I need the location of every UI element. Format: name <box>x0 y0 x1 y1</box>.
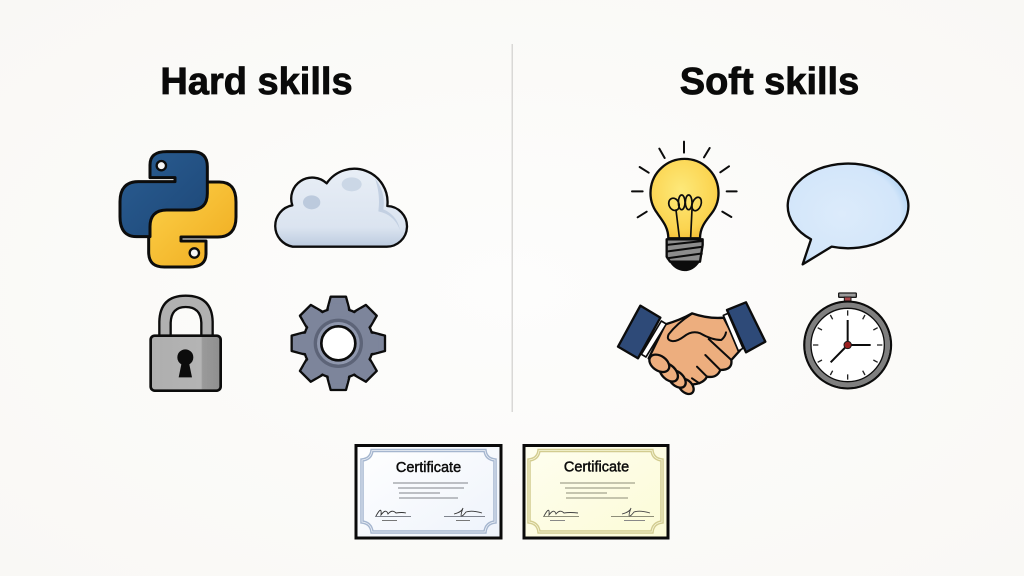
icon: python logo <box>120 152 236 267</box>
icon: gear <box>292 297 385 390</box>
panel: soft skills icons <box>632 142 908 388</box>
certificate title: Certificate <box>564 460 629 476</box>
icon: cloud <box>275 169 407 247</box>
heading: Hard skills: Hard skills <box>160 61 353 103</box>
certificate: blue <box>356 446 501 538</box>
icon: padlock <box>151 296 221 391</box>
icon: speech bubble <box>788 164 908 264</box>
panel: hard skills icons <box>120 152 407 391</box>
panel: certificates <box>356 446 668 538</box>
certificate: yellow <box>524 446 668 538</box>
icon: stopwatch clock <box>804 293 891 388</box>
heading: Soft skills: Soft skills <box>680 61 859 103</box>
icon: handshake <box>618 302 765 397</box>
icon: light bulb <box>632 142 737 271</box>
certificate title: Certificate <box>396 460 461 476</box>
